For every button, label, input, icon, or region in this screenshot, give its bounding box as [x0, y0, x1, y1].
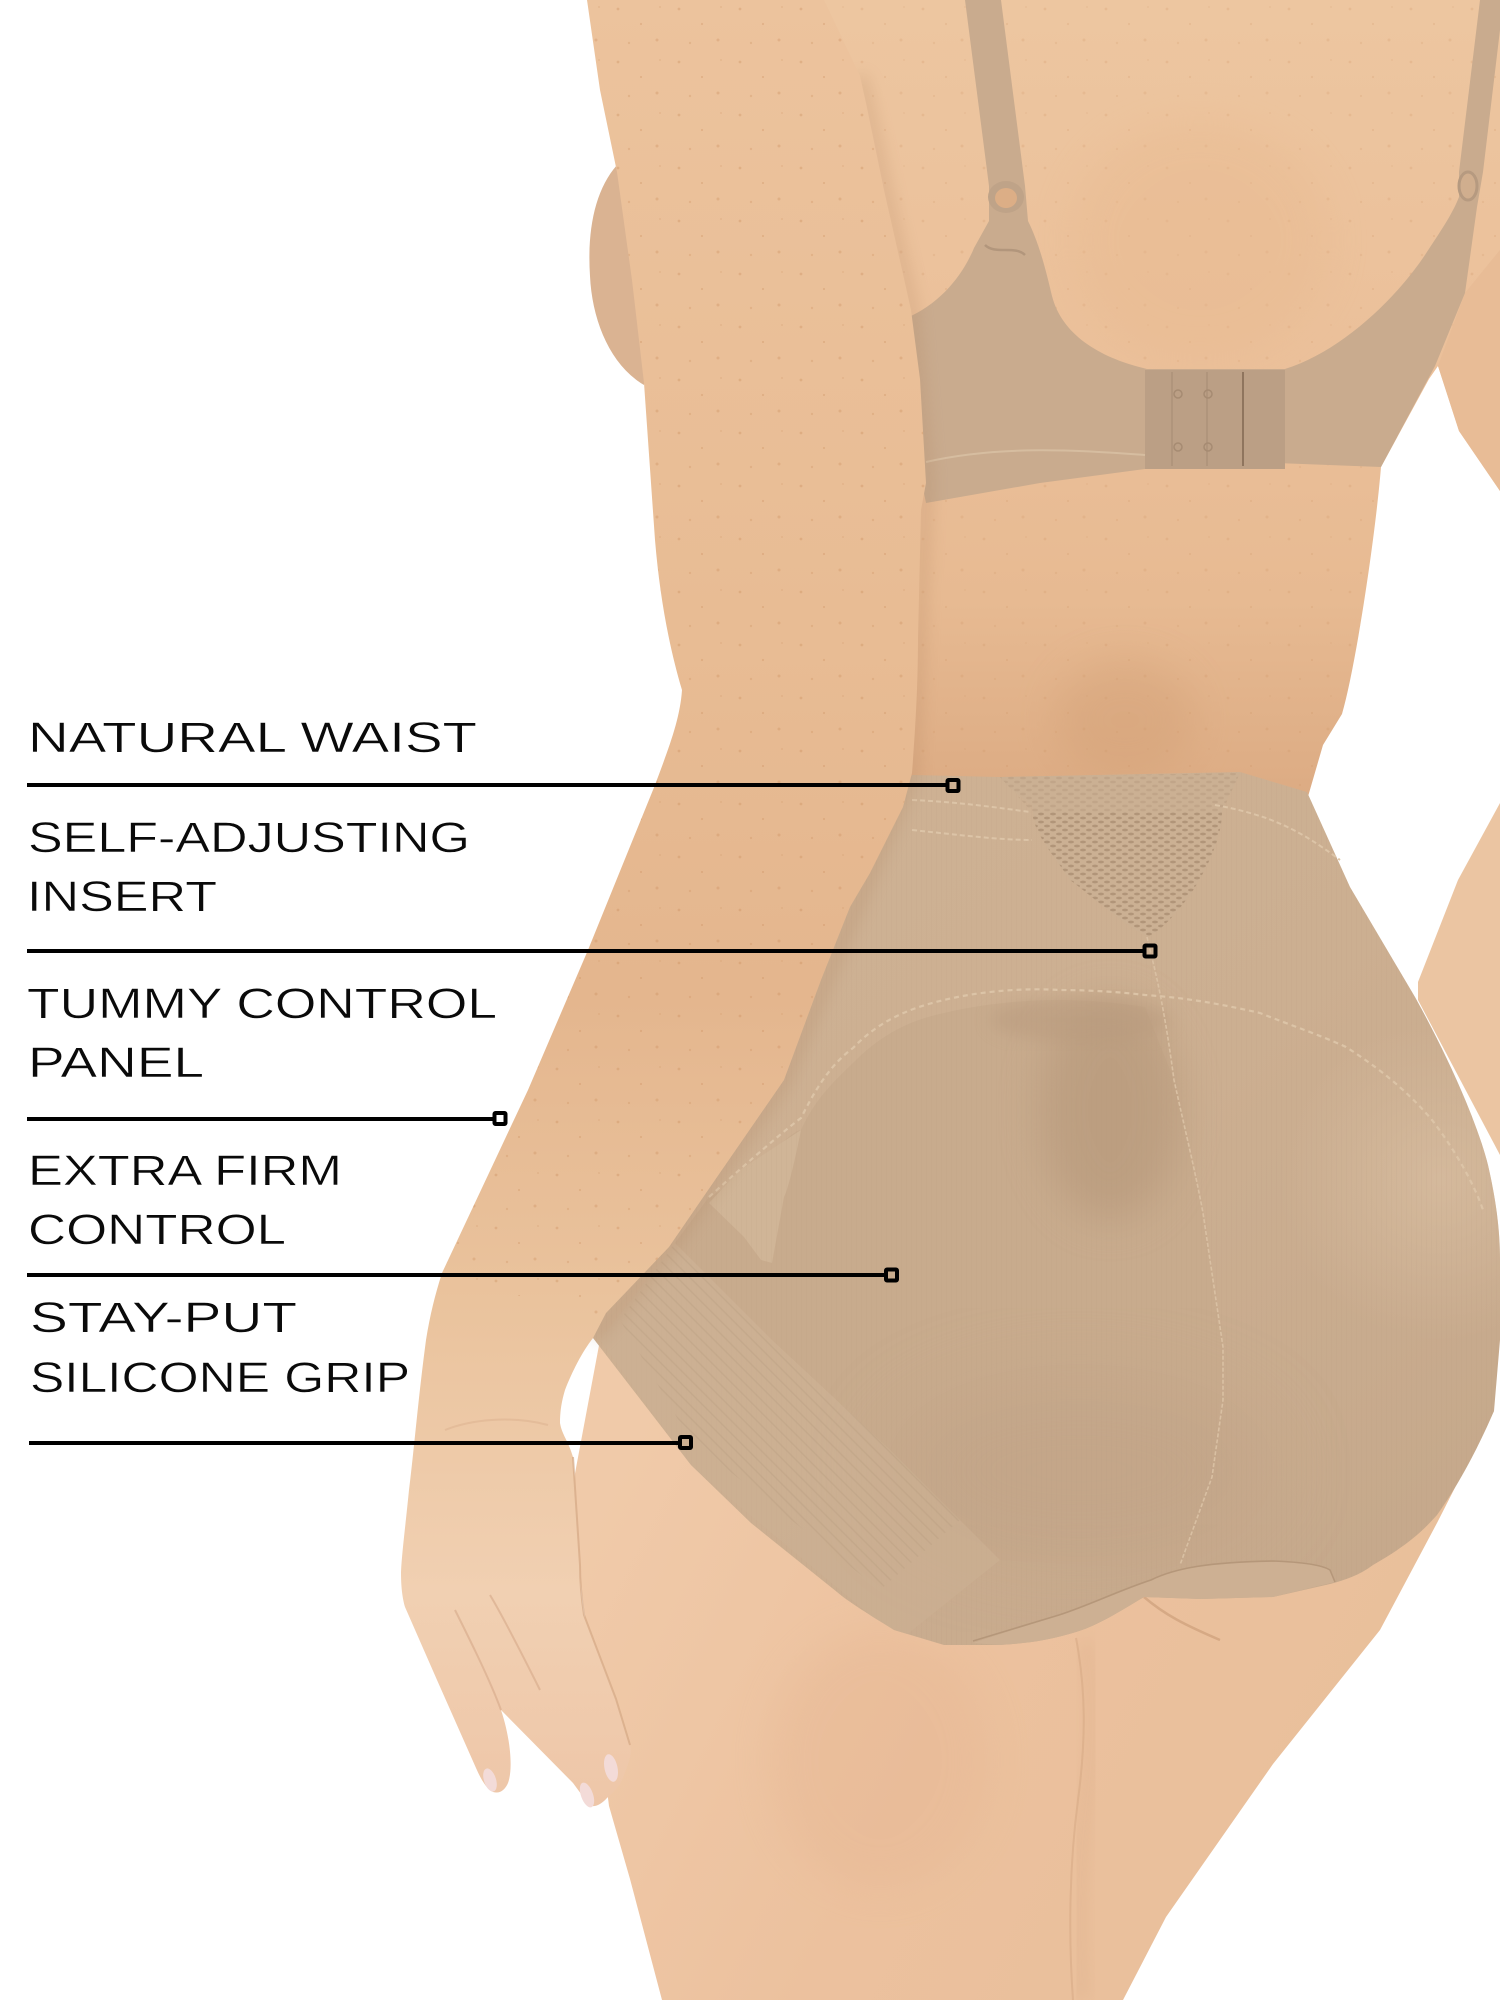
- right arm, lower: [1418, 803, 1500, 1155]
- callout: natural waist: NATURAL WAIST: [28, 714, 477, 762]
- callout: tummy control panel: [27, 980, 506, 1124]
- callout: extra firm control: CONTROL: [28, 1206, 286, 1254]
- hook and eye closure: [1145, 370, 1285, 469]
- finger creases: [455, 1595, 540, 1710]
- callout: stay-put silicone grip: SILICONE GRIP: [30, 1354, 410, 1402]
- fingernails: [602, 1753, 620, 1783]
- callout: natural waist: [27, 714, 958, 791]
- callout: stay-put silicone grip: [29, 1294, 691, 1448]
- callout: self-adjusting insert: INSERT: [27, 873, 217, 921]
- darker centre of panel: [1049, 1036, 1171, 1208]
- lighter side gore: [709, 1130, 801, 1263]
- strap ring, right: [1459, 172, 1477, 200]
- bra cup at the side of the body: [589, 165, 670, 385]
- left arm and hand: [401, 0, 926, 1809]
- hand edge against thigh: [573, 1457, 630, 1745]
- hip highlight: [1378, 1118, 1496, 1246]
- stitched seams: [1147, 937, 1223, 1565]
- callout: self-adjusting insert: [27, 814, 1156, 956]
- arm shadow on torso: [593, 76, 926, 1338]
- mesh insert: [1000, 773, 1240, 937]
- bottom diagonal ribbed band: [600, 1243, 1000, 1640]
- strap ring, left: [988, 181, 1024, 213]
- callout: self-adjusting insert: SELF-ADJUSTING: [28, 814, 470, 862]
- bottom band seam: [926, 450, 1145, 462]
- fabric rib texture: [590, 770, 1500, 1650]
- callout: extra firm control: EXTRA FIRM: [28, 1147, 342, 1195]
- callout: tummy control panel: TUMMY CONTROL: [27, 980, 497, 1028]
- lower panel shade: [890, 1380, 1270, 1560]
- callout: tummy control panel: PANEL: [28, 1039, 204, 1087]
- gusset: [973, 1561, 1335, 1645]
- right arm, upper: [1438, 250, 1500, 491]
- legs: [570, 1300, 1494, 2000]
- rear control panel: [675, 1000, 1223, 1570]
- upper back skin: [800, 0, 1500, 810]
- bra back band and straps: [905, 0, 1500, 503]
- callout: extra firm control: [27, 1147, 897, 1280]
- callout: stay-put silicone grip: STAY-PUT: [30, 1294, 297, 1342]
- shapewear brief: [590, 770, 1500, 1650]
